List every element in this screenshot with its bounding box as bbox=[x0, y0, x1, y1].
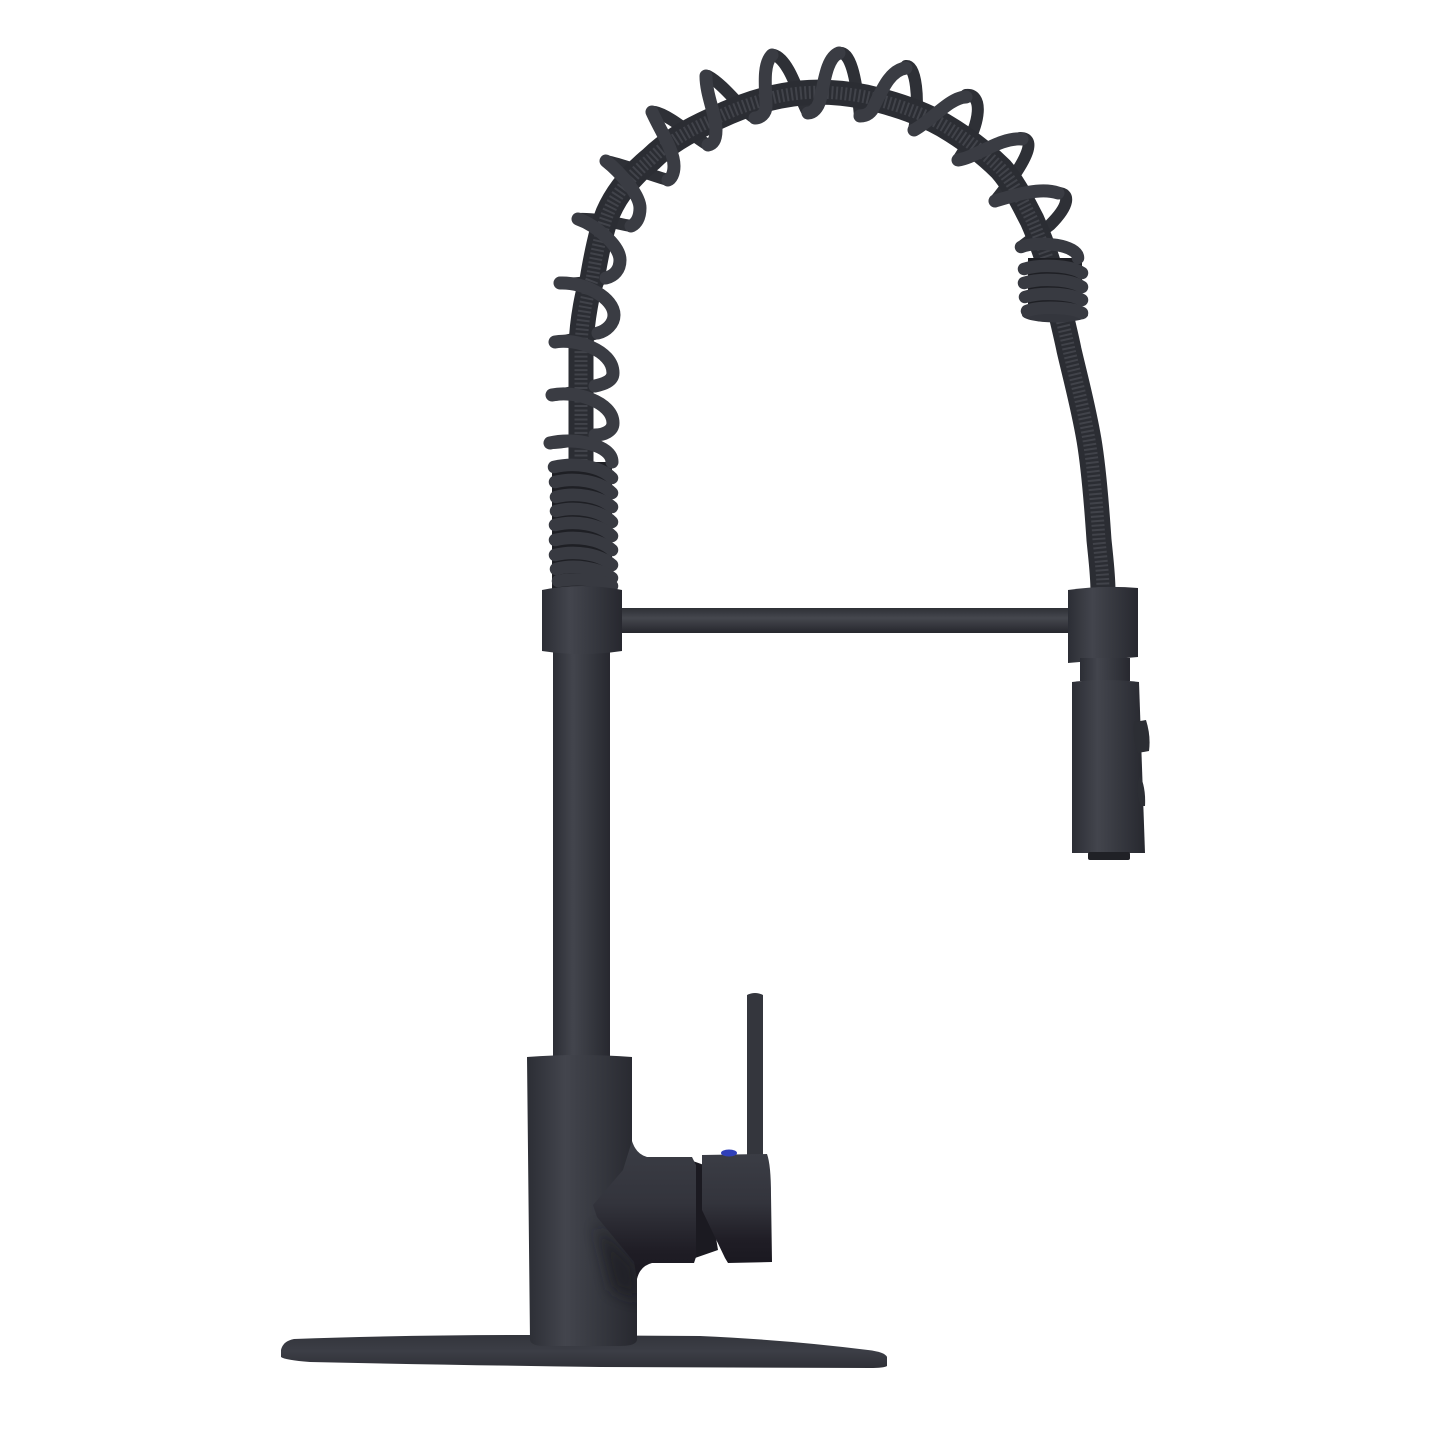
handle cap bbox=[702, 1154, 772, 1263]
deck plate bbox=[281, 1335, 887, 1368]
left collar bbox=[542, 586, 622, 654]
right coil dark backing bbox=[1028, 258, 1082, 316]
spray head ring bbox=[1080, 658, 1130, 681]
blue temperature dot bbox=[721, 1150, 737, 1156]
spring coil: rear strands behind hose bbox=[550, 53, 1066, 443]
mixer neck bbox=[593, 1141, 696, 1279]
spring coil: front strands over hose bbox=[550, 53, 1058, 462]
right coil washer bbox=[1022, 308, 1088, 322]
left coil rings bbox=[554, 465, 612, 586]
pull-down spray head bbox=[1072, 680, 1150, 860]
spring coil: tight wrap on right hose bbox=[1021, 244, 1088, 322]
left coil dark backing bbox=[552, 462, 612, 590]
braided hose bbox=[581, 92, 1103, 592]
body shadow near neck bbox=[598, 1234, 636, 1295]
spray button upper bbox=[1134, 720, 1150, 753]
faucet product illustration bbox=[281, 46, 1150, 1368]
right coil rings bbox=[1021, 244, 1082, 313]
horizontal support bar bbox=[618, 608, 1074, 633]
faucet body bbox=[527, 1055, 637, 1346]
dark wedge between neck and cap bbox=[690, 1160, 718, 1258]
spring coil: tight wrap above spout bbox=[552, 462, 612, 590]
spray button lower bbox=[1137, 775, 1145, 806]
right collar bbox=[1068, 587, 1138, 663]
spray tip bbox=[1088, 852, 1130, 860]
spout pipe bbox=[553, 645, 610, 1065]
handle lever bbox=[747, 993, 763, 1156]
